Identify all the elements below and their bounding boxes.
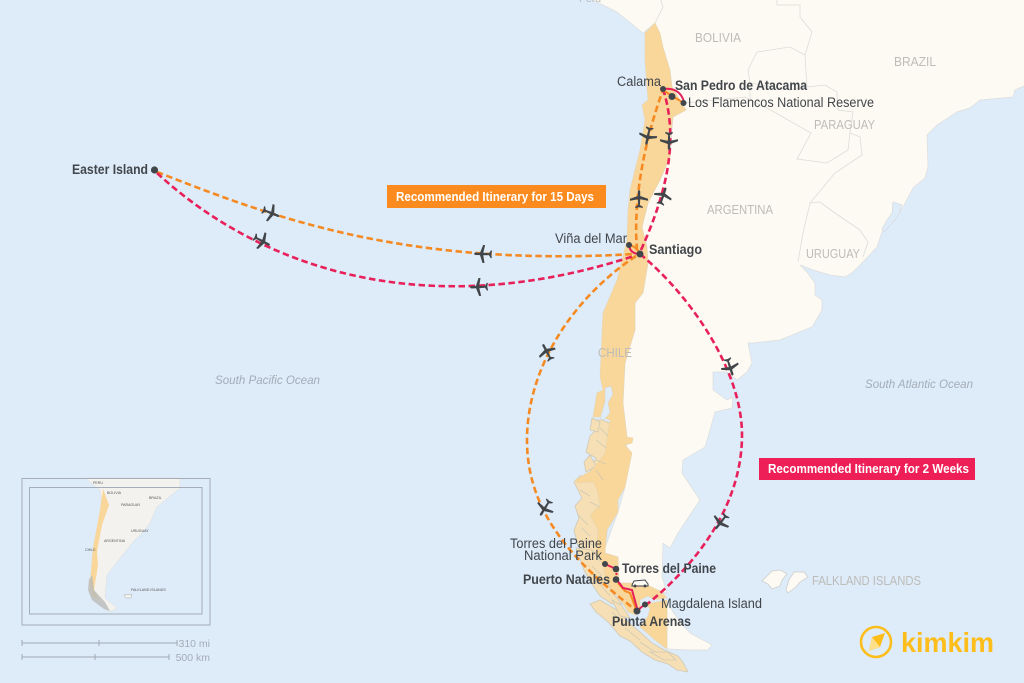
icon: compass <box>861 627 891 657</box>
place labels <box>72 74 874 629</box>
inset: labels: BRAZIL <box>149 496 162 500</box>
scale label: miles: 310 mi <box>178 638 210 650</box>
logo wordmark: kimkim <box>901 627 994 658</box>
banner: 15 days <box>387 185 606 208</box>
label: Puerto Natales: Puerto Natales <box>523 572 610 587</box>
scale label: kilometres: 500 km <box>176 652 210 664</box>
land: Falkland Islands <box>762 570 808 593</box>
label: Punta Arenas: Punta Arenas <box>612 614 691 629</box>
Chile: southern fjord islands <box>590 600 688 672</box>
label: Magdalena Island: Magdalena Island <box>661 596 762 611</box>
Chile: Tierra del Fuego <box>640 600 667 649</box>
country label: Uruguay: URUGUAY <box>806 246 860 261</box>
country label: Falkland Islands: FALKLAND ISLANDS <box>812 573 921 588</box>
logo: kimkim <box>861 627 994 658</box>
country label: Brazil: BRAZIL <box>894 54 936 69</box>
label: Los Flamencos National Reserve: Los Flamencos National Reserve <box>688 95 874 110</box>
label: National Park: National Park <box>524 548 602 563</box>
inset: labels: CHILE <box>85 548 96 552</box>
inset locator map <box>22 478 210 625</box>
label: Calama: Calama <box>617 74 661 89</box>
inset: labels: BOLIVIA <box>107 491 122 495</box>
banner: 2 weeks <box>759 458 975 480</box>
country label: Chile: CHILE <box>598 345 632 360</box>
icon: planes <box>250 125 741 535</box>
inset: land <box>85 478 180 612</box>
Chile: inner fjord water <box>578 428 655 652</box>
ocean label: South Pacific: South Pacific Ocean <box>215 375 320 387</box>
inset: labels: URUGUAY <box>131 529 149 533</box>
banner: 15 days: Recommended Itinerary for 15 Days <box>396 189 594 204</box>
label: San Pedro de Atacama: San Pedro de Atacama <box>675 78 807 93</box>
inset: Falkland Islands <box>124 594 132 598</box>
label: Torres del Paine National Park: Torres del Paine <box>510 536 602 551</box>
Magellan strait water <box>646 599 667 604</box>
Chile: lake <box>600 386 613 420</box>
Chile: western fjord islands <box>574 418 622 604</box>
inset: labels: PERU <box>93 481 103 485</box>
inset: Chile <box>90 489 109 600</box>
ocean label: South Atlantic: South Atlantic Ocean <box>865 379 973 391</box>
routes: orange 15 days flights <box>157 90 663 611</box>
icon: car <box>632 580 648 587</box>
country: Chile <box>575 23 686 615</box>
land: Tierra del Fuego east <box>667 603 712 650</box>
inset: frames <box>22 478 210 625</box>
map: land <box>574 0 1024 672</box>
country label: Argentina: ARGENTINA <box>707 202 773 217</box>
country label: Bolivia: BOLIVIA <box>695 30 741 45</box>
country label: Paraguay: PARAGUAY <box>814 117 875 132</box>
country borders <box>655 0 868 262</box>
banner: 2 weeks: Recommended Itinerary for 2 Weeks <box>768 461 969 476</box>
inset: labels: PARAGUAY <box>121 503 141 507</box>
label: Torres del Paine: Torres del Paine <box>622 561 716 576</box>
land: South America mainland <box>585 0 1024 593</box>
label: Viña del Mar: Viña del Mar <box>555 231 627 246</box>
label: Santiago: Santiago <box>649 242 702 257</box>
inset: labels: FALKLAND ISLANDS <box>131 588 166 592</box>
routes: red 2 weeks flights <box>157 92 742 605</box>
land: Patos lagoon <box>882 202 902 232</box>
inset: labels <box>85 481 166 592</box>
routes: local ground segments <box>605 89 684 611</box>
map markers <box>151 86 686 614</box>
inset: fjords <box>88 575 110 611</box>
inset: labels: ARGENTINA <box>104 539 126 543</box>
label: Easter Island: Easter Island <box>72 162 148 177</box>
scale bars <box>22 640 177 660</box>
